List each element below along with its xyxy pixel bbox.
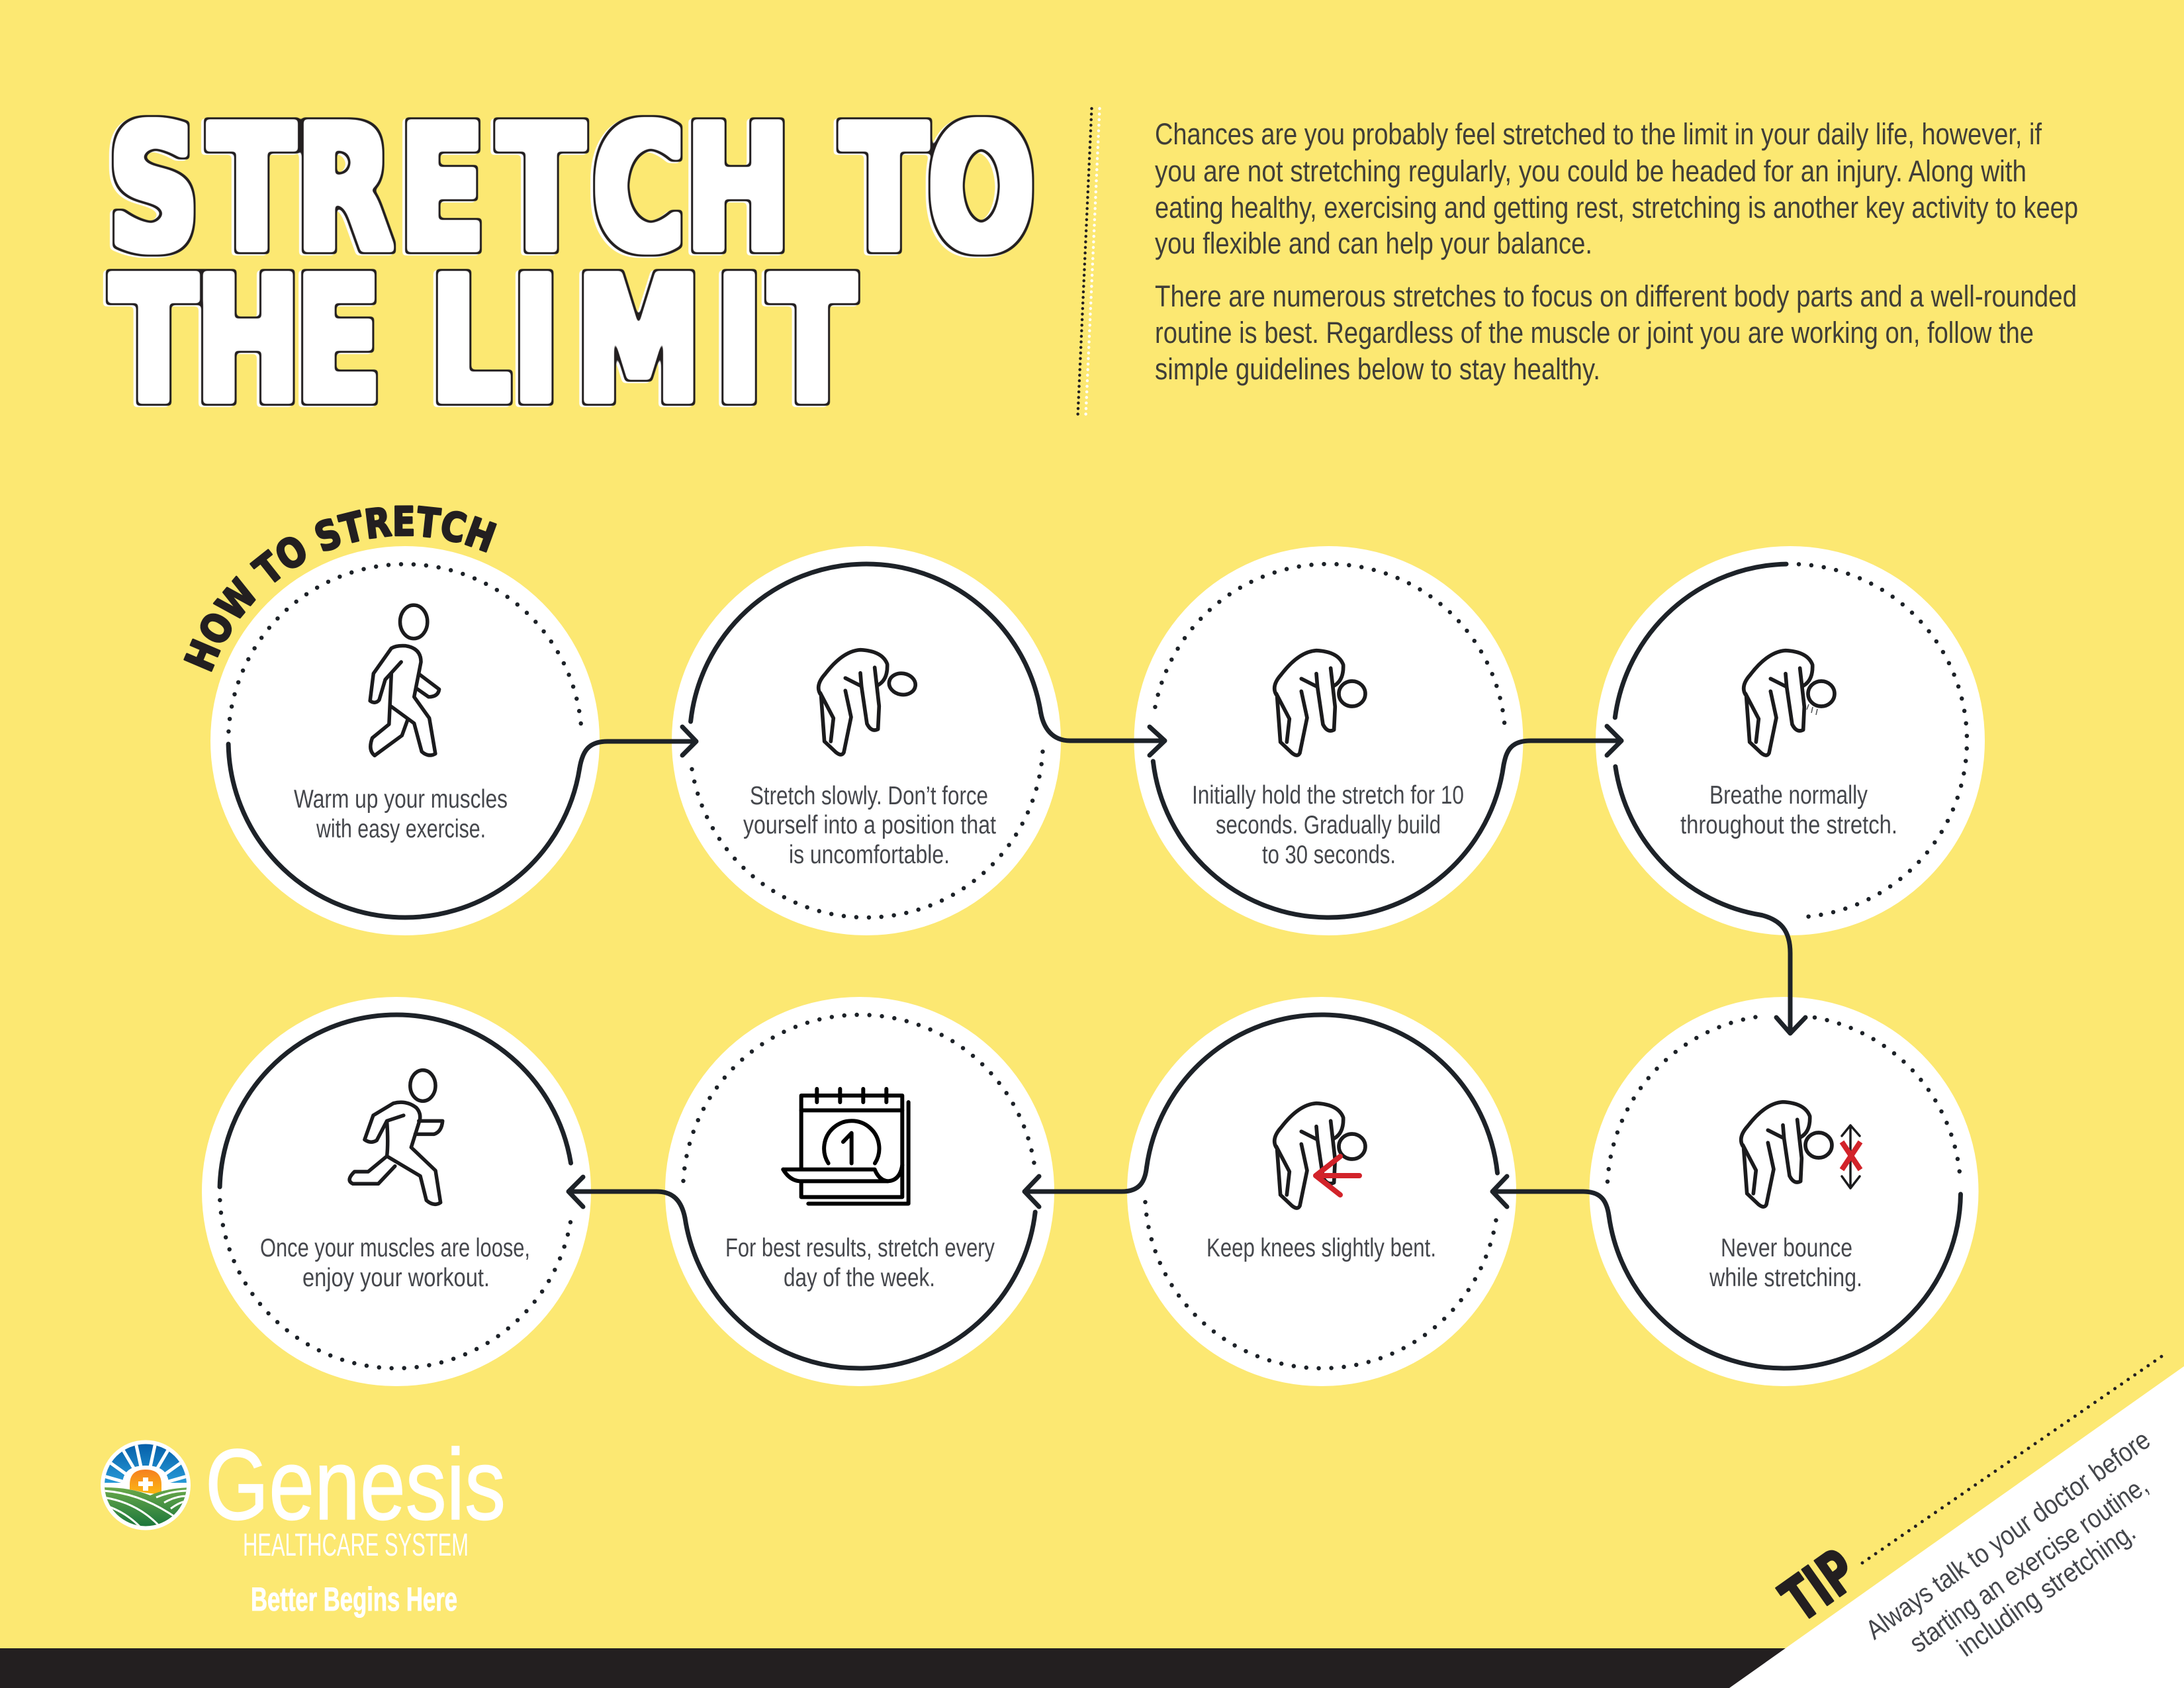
arrow: step 2 to step 3 — [1041, 713, 1165, 755]
step 7 text: day of the week. — [784, 1264, 935, 1292]
step 8: enjoy your workout — [202, 997, 591, 1386]
icon: double arrow with red x — [1842, 1125, 1860, 1188]
step 7 text: For best results, stretch every — [725, 1234, 995, 1262]
arrow: step 1 to step 2 — [580, 727, 696, 769]
step 2: stretch slowly — [672, 546, 1061, 935]
logo: genesis healthcare system — [99, 1429, 506, 1618]
bottom bar — [0, 1648, 1794, 1688]
step 4 text: Breathe normally — [1709, 781, 1868, 810]
step 1: warm up — [210, 546, 600, 935]
wordmark: Genesis — [205, 1429, 506, 1541]
arrow: step 7 to step 8 — [569, 1177, 685, 1218]
step 3 text: Initially hold the stretch for 10 — [1192, 781, 1464, 810]
arrow: step 5 to step 6 — [1492, 1176, 1609, 1216]
intro text: routine is best. Regardless of the muscle or joint you are working on, follow the — [1155, 316, 2034, 350]
step 1 text: Warm up your muscles — [294, 785, 508, 814]
tagline: Better Begins Here — [251, 1581, 457, 1618]
tip panel — [1729, 1352, 2184, 1688]
dotted title divider — [1078, 109, 1100, 414]
step 2 text: Stretch slowly. Don’t force — [750, 782, 988, 810]
step 4 text: throughout the stretch. — [1680, 811, 1897, 839]
icon: running person — [349, 1070, 443, 1204]
intro text: simple guidelines below to stay healthy. — [1155, 352, 1600, 386]
step 8 text — [260, 1234, 530, 1292]
step 5: never bounce — [1590, 997, 1979, 1386]
step 3 text: seconds. Gradually build — [1216, 811, 1441, 839]
icon: calendar — [783, 1089, 909, 1203]
step 6: knees bent — [1127, 997, 1516, 1386]
icon: bending figure — [1275, 651, 1365, 755]
step 3 text: to 30 seconds. — [1262, 841, 1396, 869]
intro text: you flexible and can help your balance. — [1155, 226, 1592, 260]
arrow: step 4 to step 5 — [1762, 915, 1805, 1033]
step 5 text: while stretching. — [1709, 1264, 1862, 1292]
icon: bending figure — [1741, 1102, 1832, 1207]
tip dotted line — [1862, 1352, 2167, 1563]
icon: bending figure — [819, 650, 917, 755]
step 7 text — [725, 1234, 995, 1292]
step 5 text: Never bounce — [1721, 1234, 1852, 1262]
icon: bending figure — [1275, 1103, 1365, 1208]
step 3: hold the stretch — [1134, 546, 1524, 935]
curved heading: how to stretch: HOW TO STRETCH — [183, 505, 497, 672]
step 5 text — [1709, 1234, 1862, 1292]
icon: bending figure — [1744, 651, 1835, 755]
step 1 text: with easy exercise. — [316, 815, 486, 843]
step 2 text: is uncomfortable. — [789, 841, 950, 869]
tip text: including stretching. — [1952, 1516, 2141, 1662]
logo emblem — [101, 1440, 191, 1530]
step 2 text: yourself into a position that — [743, 811, 996, 839]
title — [109, 90, 1034, 441]
icon: walking person — [370, 605, 439, 755]
tip label: TIP — [1769, 1536, 1870, 1636]
title: STRETCH TO — [109, 90, 1034, 289]
step 4: breathe normally — [1596, 546, 1985, 935]
title: THE LIMIT — [111, 242, 855, 441]
step 3 text — [1192, 781, 1464, 869]
intro text: Chances are you probably feel stretched to the limit in your daily life, however, if — [1155, 117, 2042, 151]
step 7: every day — [665, 997, 1054, 1386]
step 4 text — [1680, 781, 1897, 839]
step 8 text: enjoy your workout. — [302, 1264, 490, 1292]
step 8 text: Once your muscles are loose, — [260, 1234, 530, 1262]
intro text — [1155, 117, 2078, 386]
icon: breath marks — [1807, 704, 1817, 715]
step 6 text: Keep knees slightly bent. — [1206, 1234, 1436, 1262]
logo subtitle: HEALTHCARE SYSTEM — [243, 1528, 469, 1563]
arrow: step 6 to step 7 — [1024, 1168, 1146, 1207]
step 1 text — [294, 785, 508, 843]
icon: red arrow — [1316, 1156, 1359, 1195]
intro text: you are not stretching regularly, you could be headed for an injury. Along with — [1155, 154, 2026, 188]
arrow: step 3 to step 4 — [1504, 726, 1621, 765]
step 2 text — [743, 782, 996, 869]
